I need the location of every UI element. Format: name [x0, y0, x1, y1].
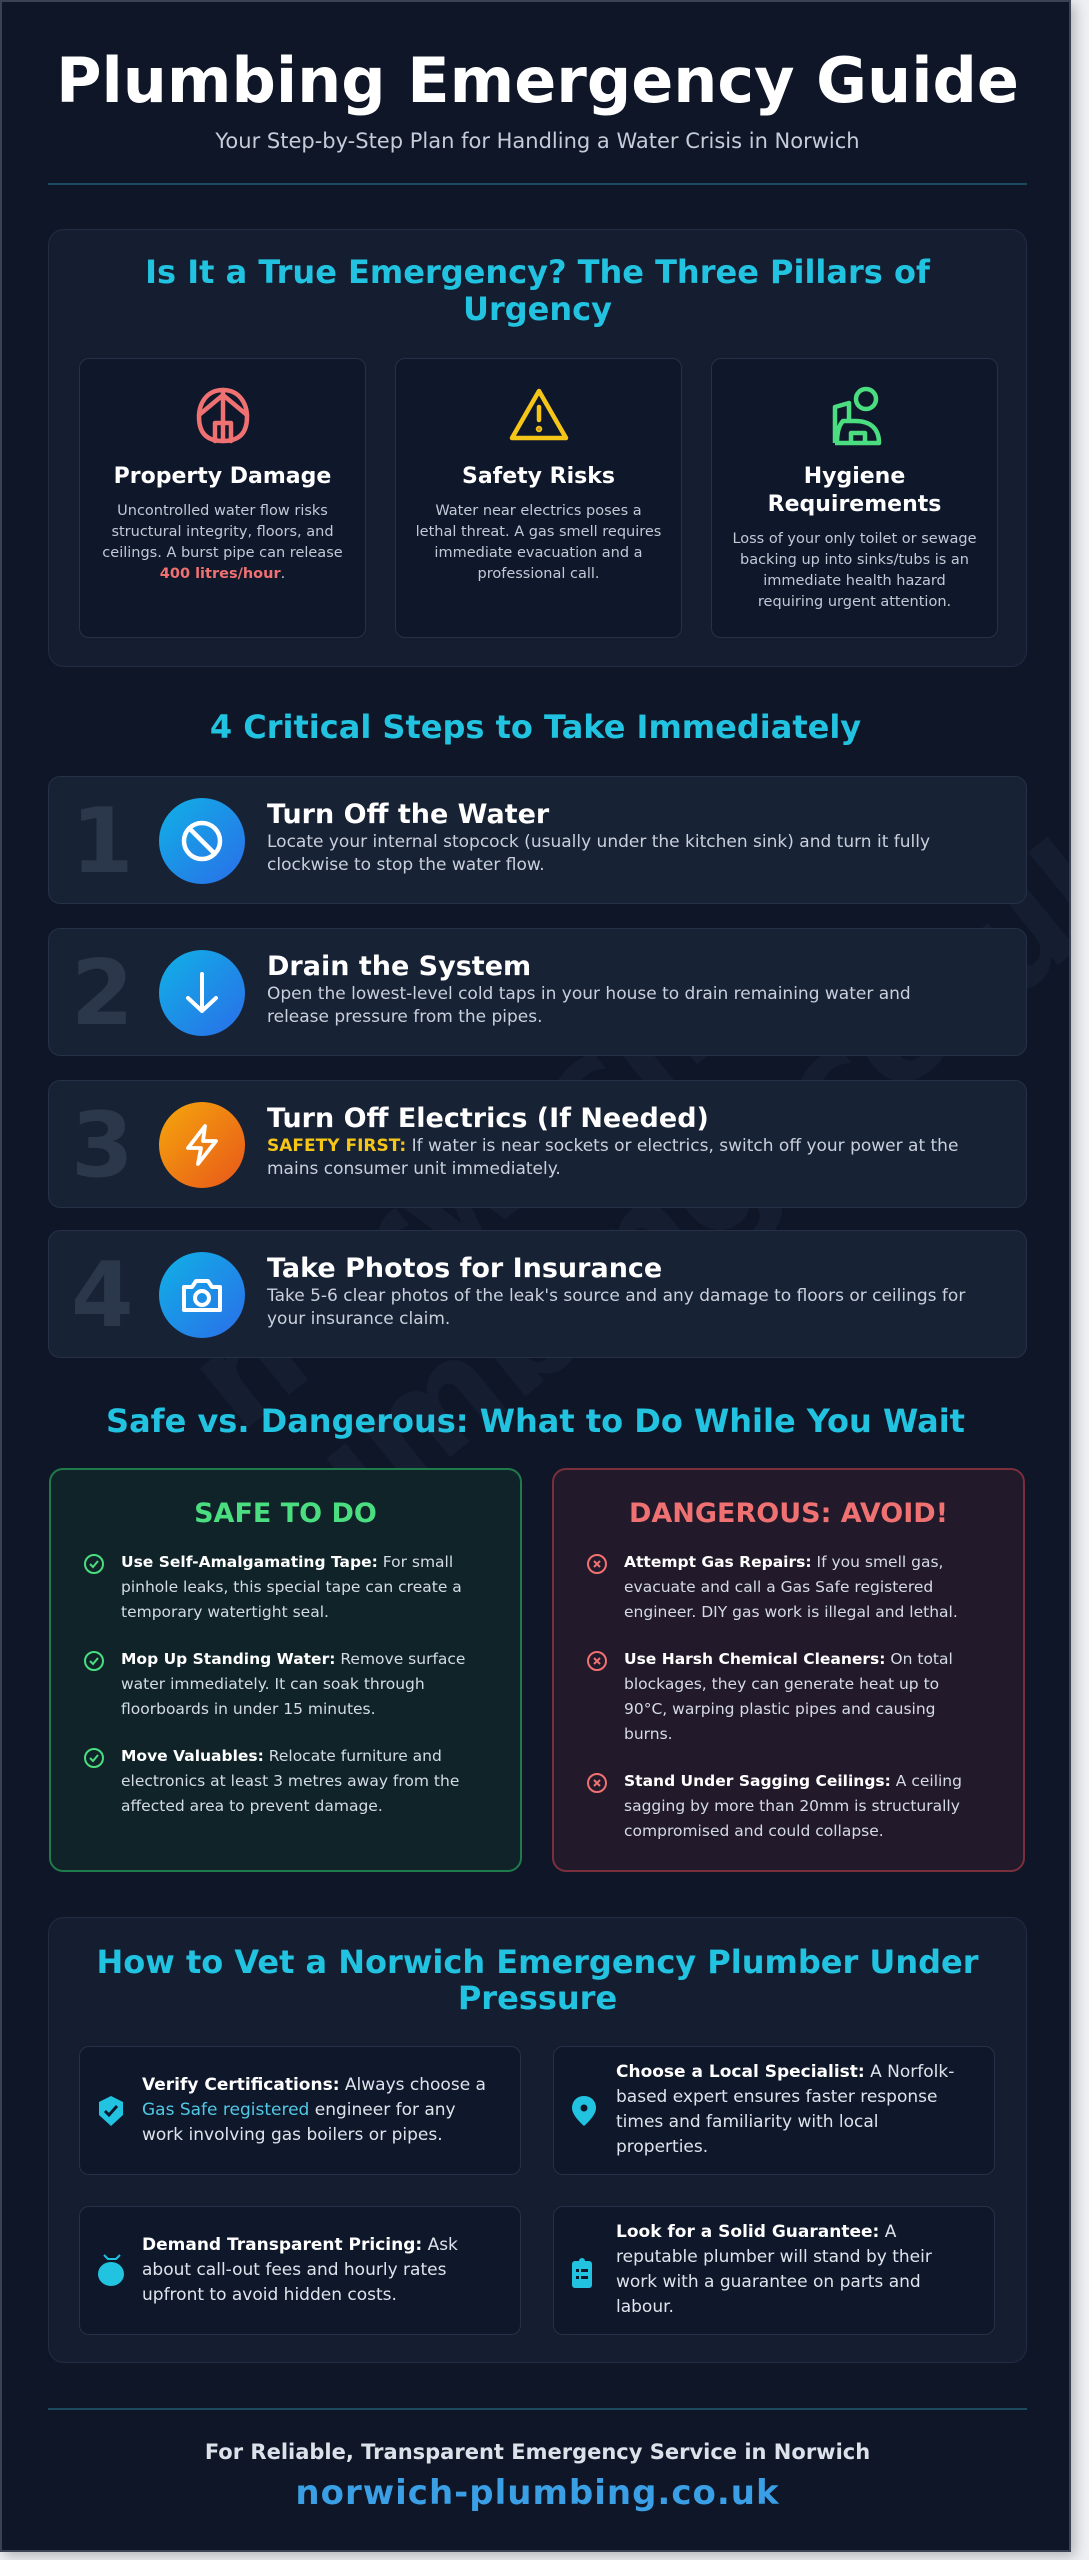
panel: safe to do: SAFE TO DO	[194, 1498, 377, 1529]
step 4: Take Photos for Insurance	[267, 1253, 662, 1284]
watermark: norwich-	[158, 905, 791, 1462]
icon: arrow down	[159, 950, 245, 1036]
card: local	[553, 2046, 995, 2175]
icon: money bag	[98, 2254, 124, 2286]
icon: badge	[99, 2096, 123, 2126]
card: property damage	[79, 358, 366, 638]
panel: dangerous: DANGEROUS: AVOID!	[629, 1498, 948, 1529]
card: hygiene: Loss of your only toilet or sewage backing up into sinks/tubs is an immediate health hazard requiring urgent attention.	[732, 531, 977, 610]
icon: pipe	[196, 388, 250, 444]
icon: toilet	[832, 386, 882, 446]
icon: pin	[572, 2096, 596, 2126]
icon: no entry	[159, 798, 245, 884]
step 4: 4	[71, 1243, 134, 1348]
item: valuables: Move Valuables: Relocate furniture and electronics at least 3 metres away from the affected area to prevent damage.	[121, 1747, 459, 1815]
title: Plumbing Emergency Guide	[56, 44, 1019, 117]
step 1: Locate your internal stopcock (usually under the kitchen sink) and turn it fully clockwise to stop the water flow.	[267, 832, 930, 875]
panel: dangerous	[552, 1468, 1025, 1872]
card: property damage: Uncontrolled water flow risks structural integrity, floors, and ceilings. A burst pipe can release 400 litres/hour.	[102, 503, 343, 582]
footer url: norwich-plumbing.co.uk	[295, 2473, 780, 2513]
panel: safe to do	[49, 1468, 522, 1872]
card: local: Choose a Local Specialist: A Norfolk-based expert ensures faster response times and familiarity with local properties.	[616, 2062, 954, 2157]
step 3: SAFETY FIRST: If water is near sockets or electrics, switch off your power at the mains consumer unit immediately.	[267, 1136, 958, 1179]
item: tape: Use Self-Amalgamating Tape: For small pinhole leaks, this special tape can create a temporary watertight seal.	[121, 1553, 462, 1621]
card: hygiene	[711, 358, 998, 638]
step 3: Turn Off Electrics (If Needed)	[267, 1103, 709, 1134]
item: mop: Mop Up Standing Water: Remove surface water immediately. It can soak through floorboards in under 15 minutes.	[121, 1650, 465, 1718]
card: guarantee: Look for a Solid Guarantee: A reputable plumber will stand by their work with a guarantee on parts and labour.	[616, 2222, 932, 2317]
step 2: Open the lowest-level cold taps in your house to drain remaining water and release pressure from the pipes.	[267, 984, 911, 1027]
icon: warning	[510, 388, 568, 440]
card: pricing: Demand Transparent Pricing: Ask about call-out fees and hourly rates upfront to avoid hidden costs.	[142, 2235, 458, 2305]
card: hygiene: Requirements	[768, 492, 941, 517]
card: safety risks	[395, 358, 682, 638]
card: safety risks: Water near electrics poses a lethal threat. A gas smell requires immediate evacuation and a professional call.	[416, 503, 661, 582]
step 1	[48, 776, 1027, 904]
item: chemicals: Use Harsh Chemical Cleaners: On total blockages, they can generate heat up to 90°C, warping plastic pipes and causing burns.	[624, 1650, 953, 1743]
card: safety risks: Safety Risks	[462, 464, 615, 489]
heading: safe vs dangerous: Safe vs. Dangerous: What to Do While You Wait	[106, 1402, 965, 1440]
step 1: Turn Off the Water	[267, 799, 549, 830]
heading: pillars: Is It a True Emergency? The Three Pillars of Urgency	[145, 253, 930, 328]
step 3	[48, 1080, 1027, 1208]
heading: critical steps: 4 Critical Steps to Take Immediately	[210, 708, 861, 746]
step 1: 1	[71, 789, 134, 894]
card: hygiene: Hygiene	[804, 464, 905, 489]
card: guarantee	[553, 2206, 995, 2335]
step 2: 2	[71, 941, 134, 1046]
icon: clipboard	[572, 2258, 592, 2288]
card: certifications	[79, 2046, 521, 2175]
step 3: 3	[71, 1093, 134, 1198]
footer text: For Reliable, Transparent Emergency Service in Norwich	[205, 2440, 870, 2464]
item: ceilings: Stand Under Sagging Ceilings: A ceiling sagging by more than 20mm is structurally compromised and could collapse.	[624, 1772, 962, 1840]
card: pricing	[79, 2206, 521, 2335]
panel: three pillars	[48, 229, 1027, 667]
heading: vet: How to Vet a Norwich Emergency Plumber Under Pressure	[96, 1943, 979, 2017]
icon: camera	[159, 1252, 245, 1338]
card: property damage: Property Damage	[114, 464, 331, 489]
icon: lightning	[159, 1102, 245, 1188]
item: gas: Attempt Gas Repairs: If you smell gas, evacuate and call a Gas Safe registered engineer. DIY gas work is illegal and lethal.	[624, 1553, 958, 1621]
step 2: Drain the System	[267, 951, 531, 982]
panel: vet plumber	[48, 1917, 1027, 2363]
step 4	[48, 1230, 1027, 1358]
step 4: Take 5-6 clear photos of the leak's source and any damage to floors or ceilings for your insurance claim.	[267, 1286, 965, 1329]
card: certifications: Verify Certifications: Always choose a Gas Safe registered engineer for any work involving gas boilers or pipes.	[142, 2075, 486, 2145]
subtitle: Your Step-by-Step Plan for Handling a Water Crisis in Norwich	[215, 129, 860, 153]
step 2	[48, 928, 1027, 1056]
